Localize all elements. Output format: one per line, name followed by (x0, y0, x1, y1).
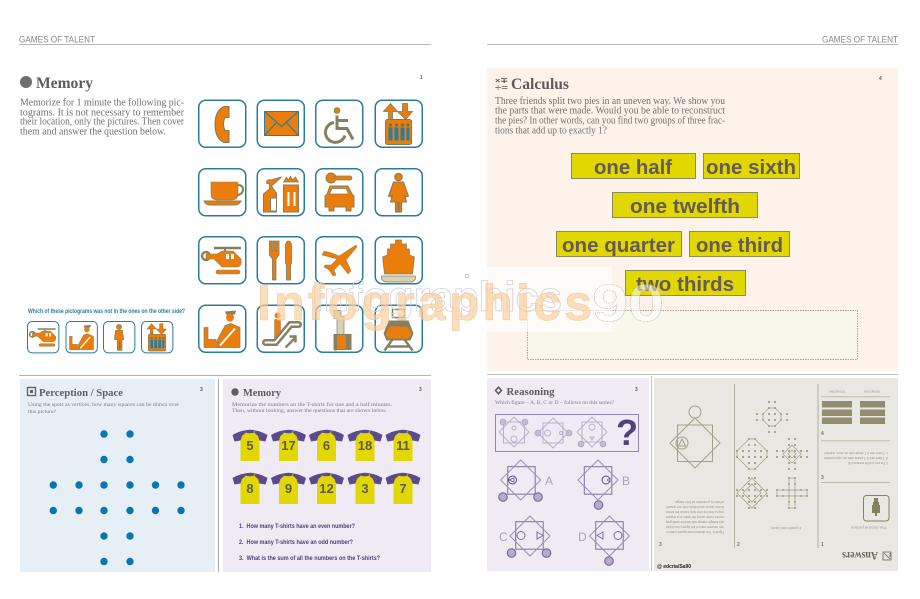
option B: B (622, 474, 630, 488)
fraction: one quarter: one quarter (562, 234, 675, 257)
option C: C (499, 530, 508, 544)
t-shirt numbers: 12 (319, 481, 334, 496)
icon: duty free shop (257, 169, 304, 216)
intro text: the pies? In other words, can you find two groups of three frac- (495, 116, 725, 126)
answer icon: elevator (142, 322, 173, 353)
t-shirt numbers: 17 (281, 438, 296, 453)
icon: customs officer (199, 305, 246, 352)
icon: wheelchair (316, 100, 363, 147)
questions: 3. What is the sum of all the numbers on the T-shirts? (239, 556, 380, 562)
fraction: one sixth: one sixth (706, 156, 796, 179)
heading: Calculus: Calculus (511, 76, 569, 93)
answer: square figure (670, 406, 720, 468)
questions (239, 524, 380, 562)
icon: woman (375, 169, 422, 216)
page header: right: GAMES OF TALENT (822, 34, 898, 44)
fraction: one twelfth (612, 192, 758, 218)
series box: ? (616, 412, 638, 453)
icon: math operators: ×∓ (495, 76, 509, 85)
answer numbers: 3 (659, 542, 662, 548)
answer numbers: 4 (821, 431, 824, 437)
prompt text (28, 403, 179, 415)
panel: memory t-shirts (223, 379, 431, 572)
intro text: the parts that were made. Would you be able to reconstruct (495, 106, 725, 116)
t-shirt numbers: 3 (361, 481, 369, 496)
icon: elevator (375, 100, 422, 147)
option D: D (578, 530, 587, 544)
fraction: one third: one third (696, 234, 783, 257)
intro text: tions that add up to exactly 1? (495, 126, 608, 136)
answer: fraction table headers: Group one (864, 390, 880, 394)
answer: upside-down caption 1: The second picture (851, 526, 887, 530)
heading: Reasoning: Reasoning (506, 386, 555, 398)
t-shirt numbers: 11 (396, 438, 410, 453)
intro text: tograms. It is not necessary to remember (20, 108, 185, 118)
answer: upside-down question answers: 1. There are 5 T-shirts with an even number (823, 451, 888, 455)
prompt text: Memorize the numbers on the T-shirts for one and a half minutes. (232, 403, 392, 408)
page number: 4 (879, 76, 882, 82)
answer box (528, 310, 858, 360)
icon: fork and knife (257, 237, 304, 284)
answer numbers (659, 431, 824, 548)
question text: Which of these pictograms was not in the ones on the other side? (28, 308, 185, 315)
icon: answers check (883, 552, 891, 560)
page number: 3 (419, 387, 422, 393)
prompt text: Which figure – A, B, C or D – follows on this series? (495, 401, 615, 406)
intro text (20, 98, 185, 138)
panel: reasoning (487, 378, 649, 571)
page number: 1 (420, 75, 423, 81)
heading: Memory: Memory (36, 75, 93, 92)
series box (496, 412, 638, 453)
icon: diamond pattern (494, 386, 502, 395)
page number: 3 (200, 387, 203, 393)
answer: fraction table (822, 401, 885, 424)
page number: 3 (635, 387, 638, 393)
answer: upside-down explanation: way so that the next step follows the series (666, 510, 724, 514)
prompt text: Then, without looking, answer the questions that are shown below. (232, 409, 387, 414)
answer: upside-down caption 2: It is possible to draw 5 squares (771, 526, 801, 530)
answer: man pictogram (864, 496, 889, 521)
intro text: their location, only the pictures. Then cover (20, 116, 185, 128)
answer: upside-down question answers: 2. There are 5 T-shirts with an odd number (823, 456, 888, 460)
panel: calculus (487, 68, 898, 371)
panel: perception / space (20, 379, 215, 572)
heading: Memory: Memory (243, 387, 281, 399)
dot grid (50, 430, 185, 565)
t-shirt numbers: 6 (323, 438, 330, 453)
prompt text: this picture? (28, 410, 57, 415)
answer: dot figure middle left (736, 438, 768, 470)
icon: baggage (316, 305, 363, 352)
prompt text: Using the spots as vertices, how many squares can be drawn over (28, 403, 179, 408)
intro text: Three friends split two pies in an uneven way. We show you (495, 96, 725, 107)
intro text: them and answer the question below. (20, 126, 166, 138)
answer: dot figure lower right (776, 477, 808, 509)
fraction: one twelfth: one twelfth (630, 195, 740, 218)
fraction: one half (572, 154, 696, 179)
t-shirt numbers: 8 (246, 481, 254, 496)
icon: memory dot (231, 388, 239, 396)
intro text (495, 96, 725, 136)
answer: upside-down explanation: circles move along the sides in a regular (665, 515, 724, 519)
prompt text (232, 403, 392, 414)
t-shirts (232, 430, 420, 504)
heading: Answers upside down: Answers (842, 549, 878, 563)
answer: upside-down question answers (823, 451, 888, 465)
answer: upside-down explanation: and triangle change side and the small gray (666, 520, 724, 524)
answer numbers: 1 (821, 542, 824, 548)
answer: upside-down question answers: 3. The sum of all the numbers is 96 (848, 461, 888, 465)
answer: fraction table headers (829, 390, 880, 394)
t-shirt numbers: 7 (399, 481, 407, 496)
panel: memory pictograms (20, 75, 423, 353)
answer: upside-down explanation: turn between each of the figures; the circles (666, 525, 724, 529)
answer icon: man (104, 322, 135, 353)
answer: dot figure middle right (776, 438, 808, 470)
answer: upside-down explanation: shown above and leaves only one answer (665, 505, 724, 509)
watermark: infographics90: Infographics (312, 273, 562, 320)
t-shirt numbers: 5 (246, 438, 254, 453)
icon: coffee cup (199, 169, 246, 216)
credit: @ edcria/Sa90 (657, 564, 691, 570)
option A (499, 460, 553, 501)
page header: left: GAMES OF TALENT (19, 34, 95, 44)
answer numbers: 3 (821, 475, 824, 481)
answer: upside-down explanation (665, 500, 724, 534)
fraction: one half: one half (594, 156, 672, 179)
watermark: infographics90 (257, 267, 664, 333)
questions: 2. How many T-shirts have an odd number? (239, 540, 353, 546)
icon: helicopter (199, 237, 246, 284)
answer: upside-down explanation: which is possible at this stage. (674, 500, 724, 504)
icon: airplane (316, 237, 363, 284)
option C (499, 516, 551, 557)
answer icon: helicopter (28, 322, 59, 353)
icon: train (375, 305, 422, 352)
option B (578, 460, 630, 509)
heading: Perception / Space: Perception / Space (39, 387, 123, 399)
answer: dot figure lower left (736, 477, 768, 509)
watermark: infographics90: 90 (592, 275, 664, 333)
answer: upside-down explanation: Figure A. The diamond and square rotate in (666, 530, 724, 534)
icon: telephone (199, 100, 246, 147)
panel: answers (654, 378, 898, 571)
icon: die (28, 388, 36, 396)
fraction: two thirds: two thirds (636, 273, 734, 296)
icon: memory dot (20, 76, 32, 88)
t-shirt numbers: 9 (285, 481, 292, 496)
icon: escalator (257, 305, 304, 352)
icon: envelope (257, 100, 304, 147)
icon: car rental key (316, 169, 363, 216)
t-shirt numbers: 18 (358, 438, 372, 453)
answer: dot figure top (756, 401, 788, 433)
answer icon: officer (66, 322, 97, 353)
option D (578, 516, 630, 565)
answer: fraction table headers: Group two (829, 390, 845, 394)
questions: 1. How many T-shirts have an even number? (239, 524, 355, 530)
answer numbers: 2 (737, 542, 740, 548)
icon: math operators lower: ÷= (495, 83, 509, 92)
watermark: infographics90: Infographics (257, 275, 592, 331)
option A: A (545, 474, 553, 488)
intro text: Memorize for 1 minute the following pic- (20, 98, 184, 108)
t-shirt numbers (246, 438, 410, 496)
icon: ship (375, 237, 422, 284)
